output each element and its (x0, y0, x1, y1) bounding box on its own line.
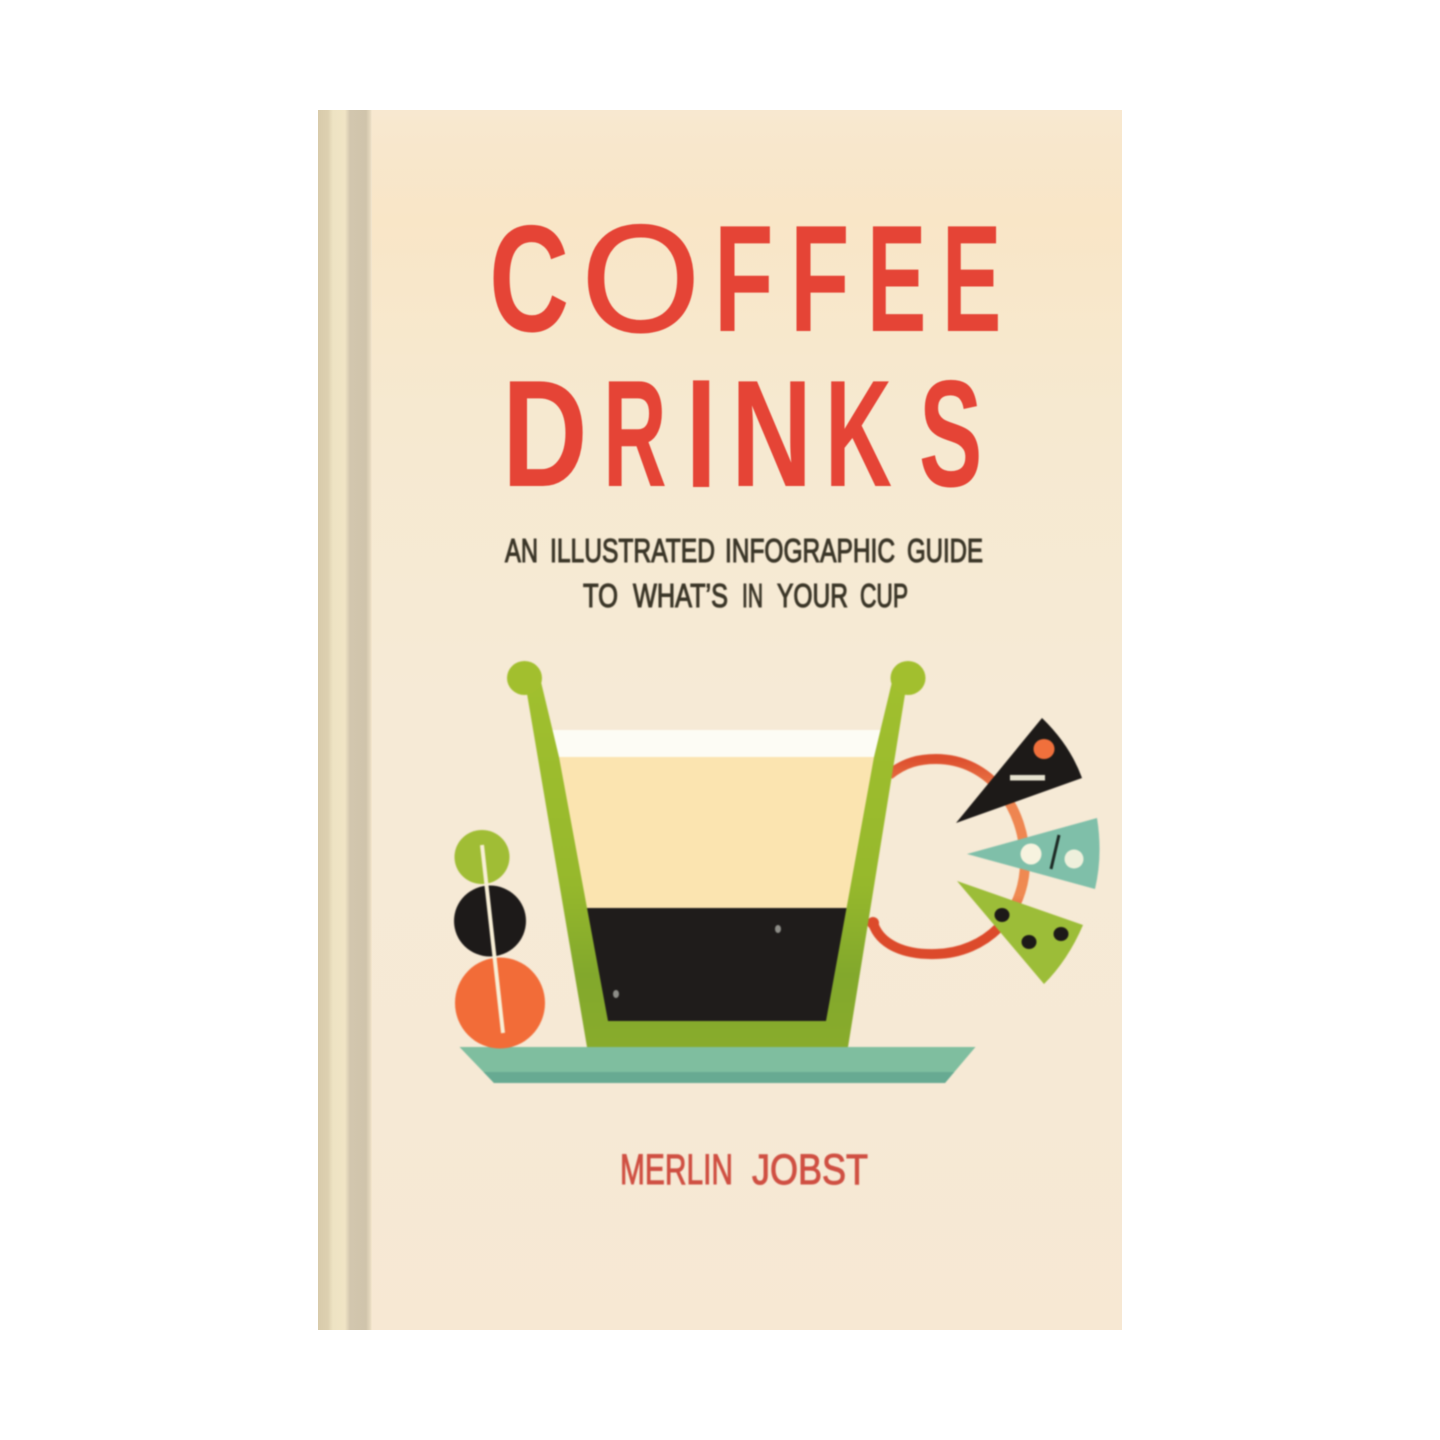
subtitle: INFOGRAPHIC (725, 532, 895, 569)
subtitle: CUP (860, 577, 908, 614)
title line: DRINKS: I (680, 349, 722, 519)
title line: COFFEE: C (488, 194, 569, 364)
skewered garnish (454, 830, 545, 1048)
black triangle (956, 718, 1082, 823)
title line: COFFEE: F (714, 194, 773, 364)
title line: COFFEE (488, 194, 1001, 364)
subtitle: GUIDE (907, 532, 983, 569)
title (488, 194, 1001, 519)
subtitle: TO (583, 577, 618, 614)
green triangle (957, 881, 1083, 984)
title line: COFFEE: F (790, 194, 849, 364)
subtitle: ILLUSTRATED (550, 532, 715, 569)
title line: DRINKS: R (603, 349, 667, 519)
subtitle: AN (505, 532, 538, 569)
saucer (460, 1047, 976, 1083)
glass outline (507, 661, 926, 1047)
title line: DRINKS: K (825, 349, 892, 519)
glass: espresso layer (584, 908, 850, 1021)
title line: DRINKS (502, 349, 982, 519)
coffee illustration (454, 661, 1100, 1083)
title line: COFFEE: O (582, 194, 700, 364)
author name: JOBST (752, 1146, 868, 1194)
title line: DRINKS: D (502, 349, 588, 519)
title line: COFFEE: E (866, 194, 926, 364)
icon: cup handle (867, 759, 1025, 954)
subtitle (505, 532, 983, 614)
subtitle: YOUR (777, 577, 848, 614)
title line: DRINKS: N (731, 349, 812, 519)
book spine (318, 110, 372, 1330)
glass: milk layer (554, 757, 880, 908)
book cover (318, 110, 1122, 1330)
subtitle: WHAT’S (633, 577, 728, 614)
author name: MERLIN (620, 1146, 733, 1194)
title line: COFFEE: E (942, 194, 1001, 364)
subtitle: IN (742, 577, 763, 614)
title line: DRINKS: S (919, 349, 982, 519)
espresso bubbles (613, 925, 781, 998)
teal triangle (967, 818, 1100, 889)
glass: foam layer (548, 730, 886, 757)
